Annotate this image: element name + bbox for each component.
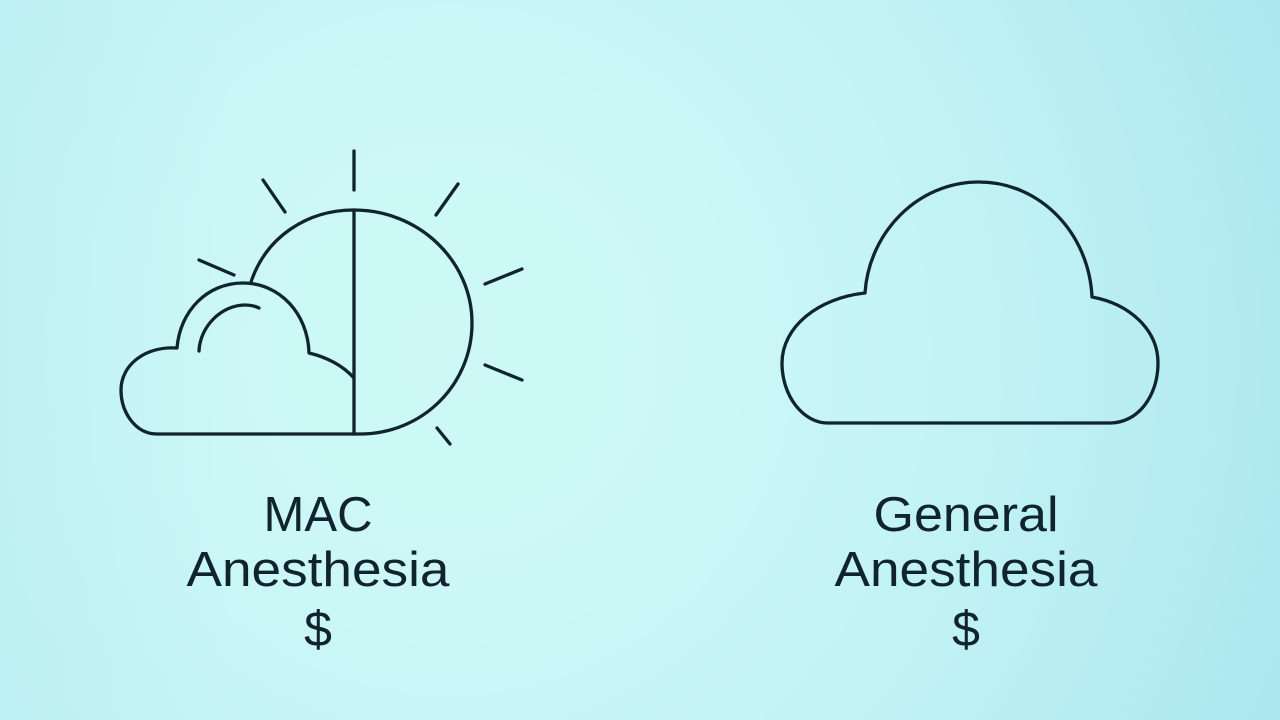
sun centre divider	[352, 210, 356, 434]
icon: cloud	[782, 182, 1158, 423]
label: cost: $	[952, 601, 980, 657]
label: General: General	[874, 488, 1058, 542]
sun outline	[251, 210, 472, 434]
label: MAC: MAC	[264, 488, 372, 542]
cloud outline	[121, 283, 354, 434]
label: Anesthesia: Anesthesia	[834, 543, 1098, 597]
panel: MAC anesthesia	[121, 151, 522, 657]
cloud inner highlight	[199, 305, 259, 351]
label: Anesthesia: Anesthesia	[186, 543, 450, 597]
panel: General anesthesia	[782, 182, 1158, 657]
sun rays	[199, 151, 522, 444]
icon: sun partly behind cloud	[121, 151, 522, 444]
label: cost: $	[304, 601, 332, 657]
